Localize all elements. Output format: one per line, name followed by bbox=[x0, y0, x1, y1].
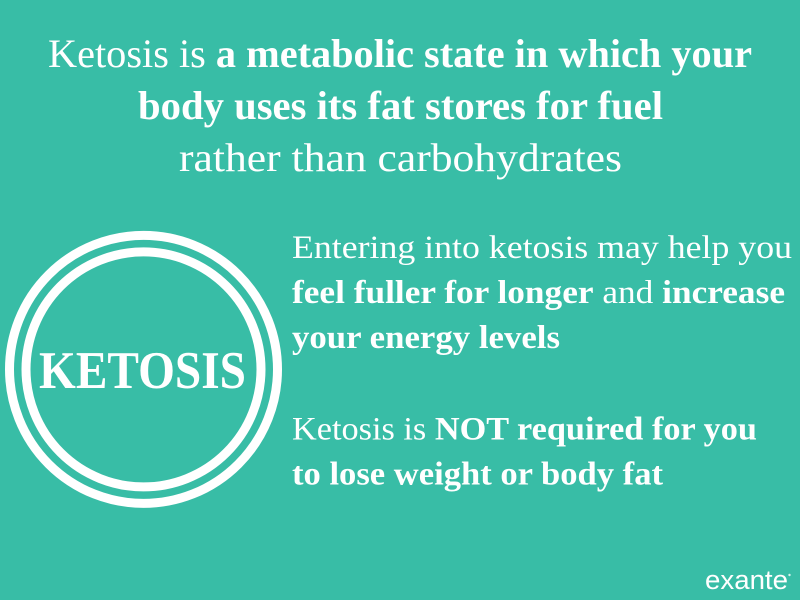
title: definition of ketosis bbox=[48, 31, 752, 180]
title: definition of ketosis: body uses its fat stores for fuel bbox=[138, 83, 663, 128]
text block: benefits of ketosis bbox=[292, 230, 792, 356]
badge label: KETOSIS bbox=[39, 342, 246, 400]
text block: benefits of ketosis: feel fuller for longer and increase bbox=[292, 275, 785, 311]
text block: benefits of ketosis: your energy levels bbox=[292, 320, 560, 356]
text block: ketosis not required bbox=[292, 412, 757, 492]
text block: benefits of ketosis: Entering into ketosis may help you bbox=[292, 230, 792, 266]
title: definition of ketosis: Ketosis is a metabolic state in which your bbox=[48, 31, 752, 76]
title: definition of ketosis: rather than carbohydrates bbox=[179, 135, 622, 180]
logo: exante: exante bbox=[705, 565, 788, 595]
icon: double ring badge bbox=[10, 235, 278, 503]
text block: ketosis not required: Ketosis is NOT required for you bbox=[292, 412, 757, 448]
text block: ketosis not required: to lose weight or body fat bbox=[292, 456, 663, 492]
